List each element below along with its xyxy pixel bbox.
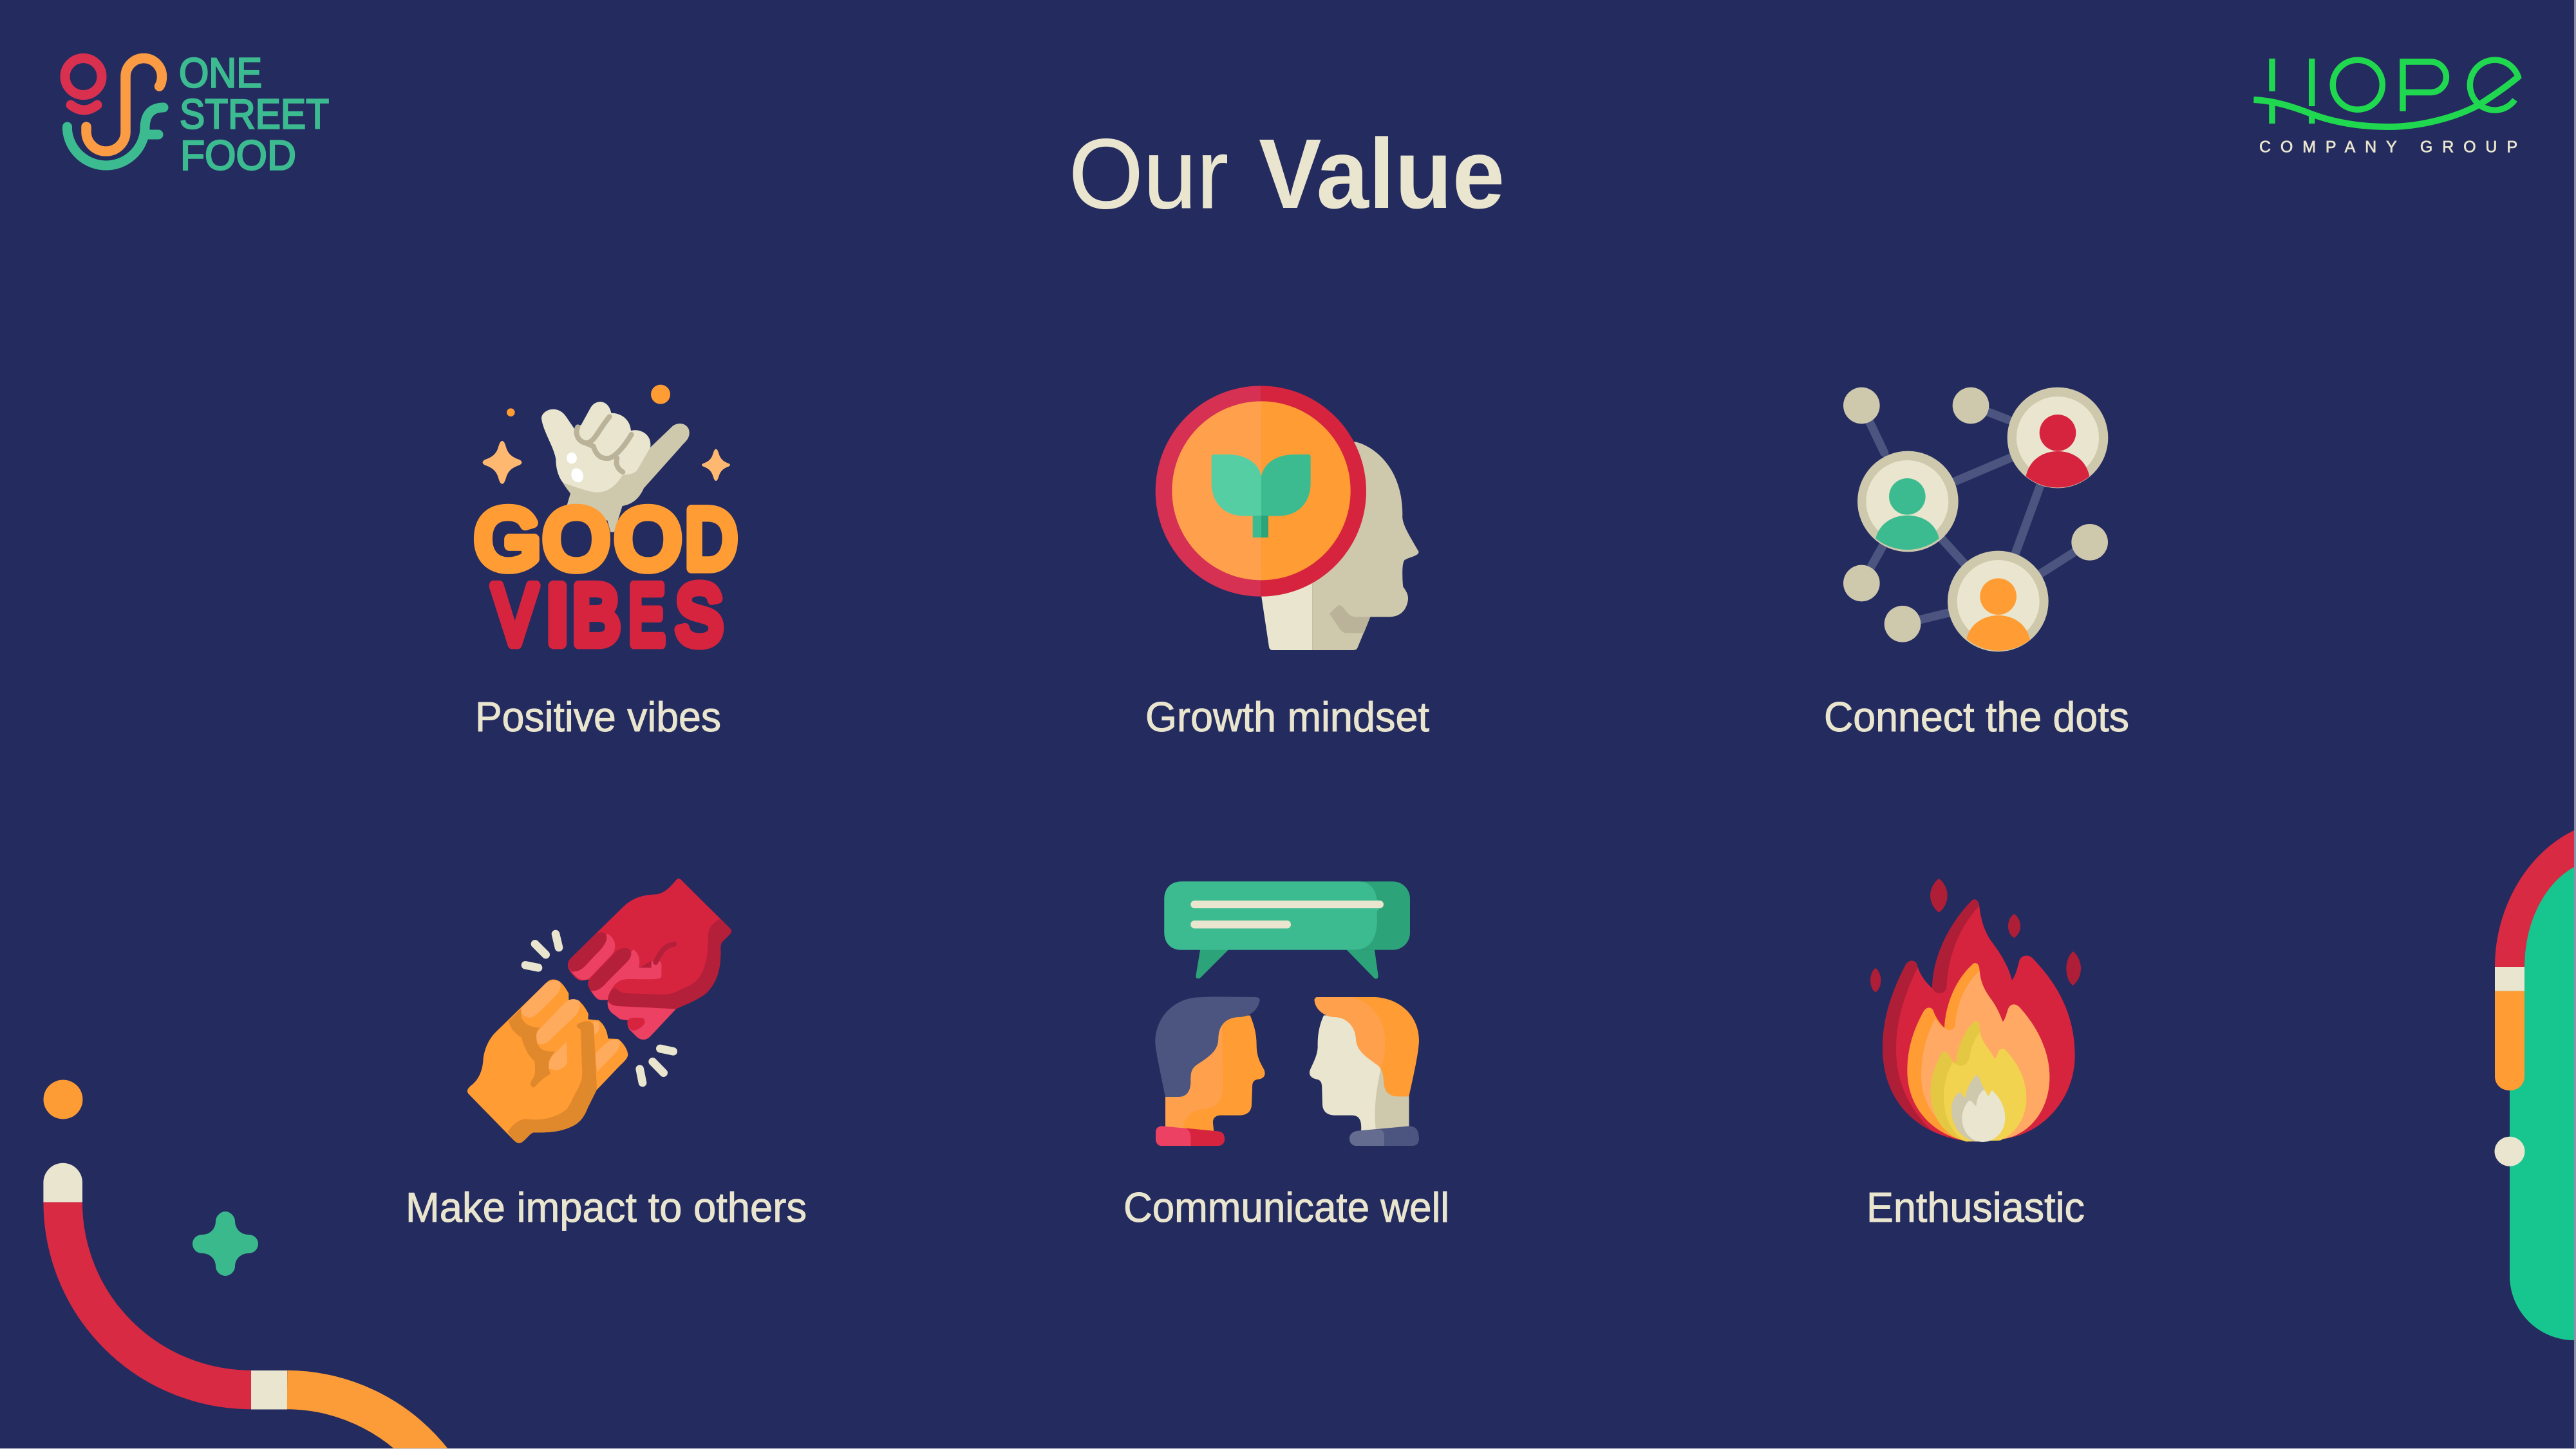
good vibes lettering: G xyxy=(475,492,540,586)
icon: good vibes hand xyxy=(475,385,737,662)
logo wordmark: STREET xyxy=(180,90,329,138)
icon: head with sprout xyxy=(1156,386,1418,650)
label: Positive vibes xyxy=(475,693,721,740)
panel: positive vibes xyxy=(475,385,737,740)
company group tagline: COMPANY GROUP xyxy=(2259,138,2517,156)
good vibes lettering: B xyxy=(572,568,620,662)
logo: One Street Food xyxy=(65,49,329,179)
logo wordmark: FOOD xyxy=(180,131,296,179)
icon: fist bump xyxy=(467,879,731,1143)
embers xyxy=(1871,879,2080,991)
dot: cream xyxy=(2494,1137,2525,1166)
label: Communicate well xyxy=(1123,1184,1449,1231)
right head xyxy=(1310,997,1419,1146)
person: green xyxy=(1876,478,1939,550)
title xyxy=(1069,118,1505,229)
label: Make impact to others xyxy=(406,1184,807,1231)
logo mark xyxy=(65,58,164,165)
good vibes lettering: O xyxy=(543,492,609,586)
good vibes lettering: O xyxy=(616,492,681,586)
title: Our xyxy=(1069,118,1228,229)
ribbon segments xyxy=(43,1163,438,1449)
title: Value xyxy=(1259,118,1505,229)
logo: Hope Company Group xyxy=(2253,59,2519,156)
red band xyxy=(2495,830,2574,967)
good vibes lettering: I xyxy=(546,568,569,662)
speech bubble xyxy=(1164,881,1410,979)
person: red xyxy=(2026,415,2089,487)
decoration: right ribbon xyxy=(2494,830,2574,1340)
cream segment xyxy=(2495,967,2524,991)
panel: make impact to others xyxy=(406,879,807,1231)
icon: two heads talking xyxy=(1155,881,1419,1146)
sparkle: green xyxy=(193,1211,258,1276)
logo wordmark xyxy=(179,49,329,179)
good vibes lettering: V xyxy=(493,568,537,662)
person: orange xyxy=(1966,578,2030,651)
label: Growth mindset xyxy=(1145,693,1429,740)
left head xyxy=(1155,996,1265,1146)
hope mark xyxy=(2253,59,2519,127)
good vibes lettering xyxy=(475,492,737,662)
good vibes lettering: D xyxy=(685,492,737,586)
label: Enthusiastic xyxy=(1866,1184,2085,1231)
label: Connect the dots xyxy=(1824,693,2129,740)
orange fist xyxy=(467,980,628,1143)
icon: flame xyxy=(1871,879,2080,1142)
red fist xyxy=(568,879,731,1040)
good vibes lettering: E xyxy=(629,568,664,662)
panel: communicate well xyxy=(1123,881,1449,1231)
decoration: bottom-left ribbon xyxy=(43,1080,438,1449)
impact ticks xyxy=(525,934,673,1083)
green band xyxy=(2510,866,2574,1340)
logo wordmark: ONE xyxy=(179,49,262,97)
icon: people network xyxy=(1843,388,2108,651)
panel: connect the dots xyxy=(1824,388,2129,740)
panel: enthusiastic xyxy=(1866,879,2085,1231)
orange segment xyxy=(2495,991,2524,1090)
panel: growth mindset xyxy=(1145,386,1429,740)
dot: orange xyxy=(44,1080,82,1119)
good vibes lettering: S xyxy=(675,568,722,662)
